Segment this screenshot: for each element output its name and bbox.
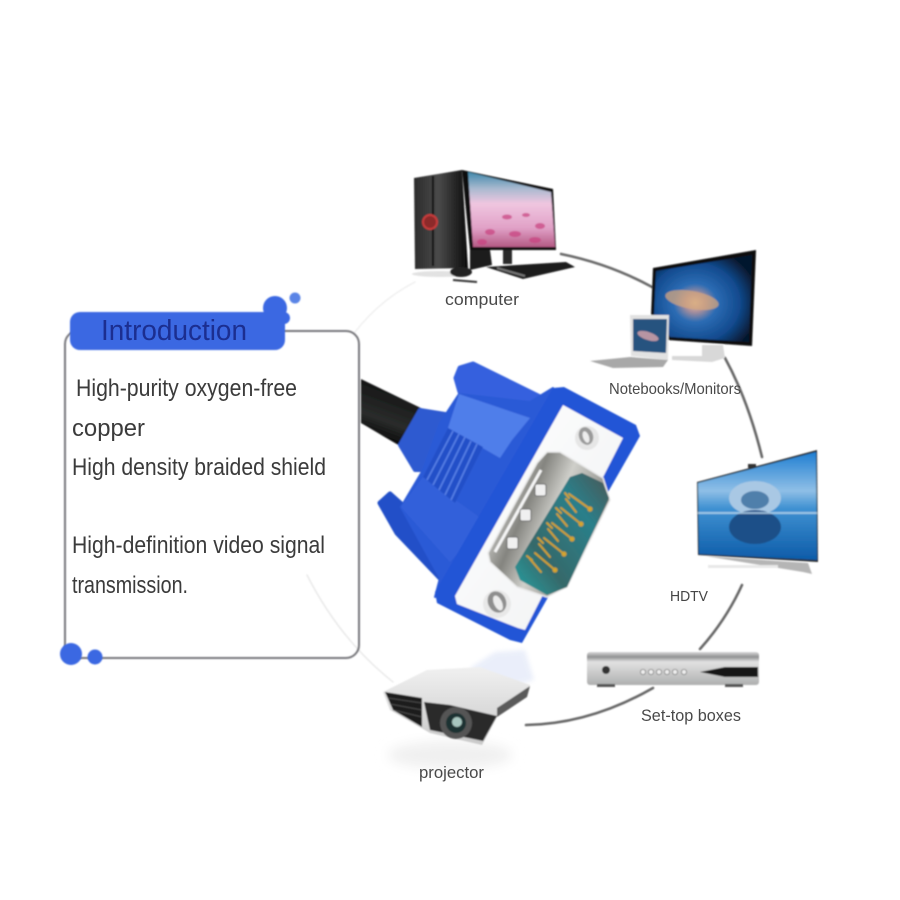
- top thumbscrew: [456, 364, 540, 420]
- mouse: [450, 267, 472, 277]
- feet: [597, 684, 615, 687]
- keyboard: [486, 262, 575, 279]
- stand: [672, 345, 725, 362]
- monitor stand: [503, 250, 512, 264]
- tower: [414, 170, 468, 269]
- gold pins: [527, 493, 592, 572]
- VGA connector: [361, 364, 640, 643]
- side stripe: [497, 686, 530, 717]
- bottom thumbscrew: [380, 494, 453, 578]
- top screw: [575, 425, 599, 450]
- device: set-top box: [587, 652, 759, 687]
- metal shell: [488, 452, 610, 597]
- screen: [697, 450, 818, 562]
- lens housing: [424, 702, 497, 741]
- body: [383, 667, 530, 745]
- monitor: [462, 170, 556, 250]
- ring of connecting lines: [307, 254, 762, 725]
- camera: [748, 464, 756, 468]
- feature list: copper: [72, 415, 145, 442]
- notebook: [630, 315, 669, 360]
- tree on lake: [729, 481, 781, 515]
- bottom decorative dots: [60, 643, 102, 665]
- device: HDTV: [697, 450, 818, 574]
- header badge: [70, 292, 300, 350]
- feature list: High-definition video signal: [72, 532, 325, 559]
- teal insert: [515, 473, 609, 595]
- feature list: High density braided shield: [72, 454, 326, 481]
- feature list: [72, 375, 326, 599]
- strain relief: [400, 410, 445, 470]
- display: [700, 667, 758, 677]
- blue flange: [435, 387, 640, 643]
- feet: [705, 556, 812, 574]
- casing: [587, 652, 759, 685]
- heading: Introduction: [101, 315, 247, 347]
- device: monitor and notebook: [590, 250, 756, 368]
- power button: [602, 666, 610, 674]
- lens: [440, 707, 472, 739]
- label: computer: computer: [445, 290, 519, 309]
- button row: [640, 669, 687, 675]
- device: projector: [383, 650, 534, 769]
- panel: introduction: [60, 292, 359, 665]
- cable: [361, 379, 425, 446]
- monitor: [651, 250, 756, 346]
- flower blots: [477, 213, 545, 245]
- bottom screw: [483, 588, 511, 618]
- feature list: High-purity oxygen-free: [76, 375, 297, 402]
- ribbed grip: [423, 428, 483, 503]
- vent: [385, 692, 422, 727]
- shell holes: [507, 484, 546, 549]
- reflections: [470, 650, 534, 690]
- panel outline: [65, 331, 359, 658]
- metal plate: [455, 405, 623, 630]
- label: projector: projector: [419, 763, 484, 782]
- floor shadow: [412, 271, 468, 277]
- shell highlight: [495, 470, 541, 552]
- device: computer: [412, 170, 575, 282]
- label: set-top boxes: Set-top boxes: [641, 706, 741, 725]
- connector body: [401, 388, 553, 597]
- label: HDTV: HDTV: [670, 588, 708, 605]
- label: notebooks and monitors: Notebooks/Monitors: [609, 381, 741, 398]
- feature list: transmission.: [72, 572, 188, 599]
